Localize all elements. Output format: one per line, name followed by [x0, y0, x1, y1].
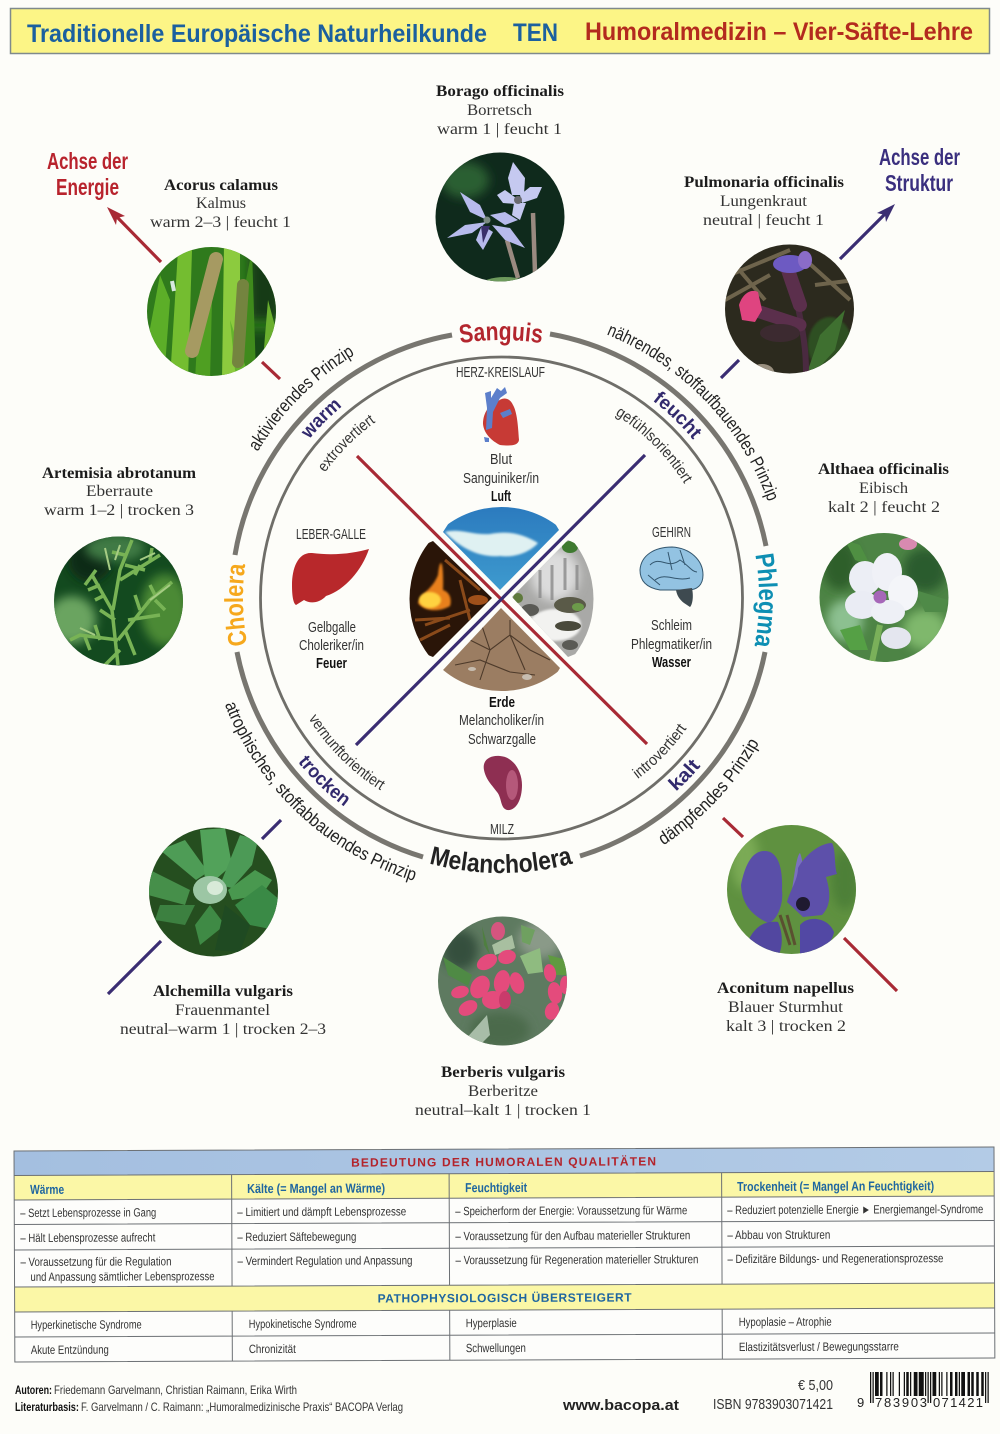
column headers: Wärme [30, 1182, 64, 1197]
plant photo: Berberis [435, 914, 571, 1049]
column: Feuchtigkeit: – Speicherform der Energie: Voraussetzung für Wärme [455, 1203, 688, 1218]
column: Trockenheit: – Defizitäre Bildungs- und Regenerationsprozesse [727, 1251, 944, 1266]
sector: Phlegma: Schleim [651, 618, 692, 634]
plant label: Alchemilla vulgaris [120, 983, 326, 1038]
price and ISBN [713, 1378, 833, 1413]
outer ring [235, 334, 766, 857]
credits: F. Garvelmann / C. Raimann: „Humoralmedizinische Praxis“ BACOPA Verlag [81, 1400, 403, 1414]
sector: Melancholera: Erde [489, 695, 515, 711]
wedge: earth [443, 608, 560, 691]
temperament orientation labels [310, 398, 694, 810]
credits [15, 1383, 403, 1414]
icon: liver [292, 549, 369, 605]
column: Trockenheit: – Abbau von Strukturen [727, 1228, 830, 1242]
icon: spleen [484, 756, 522, 810]
principle labels [226, 326, 777, 882]
plant label: Aconitum napellus: kalt 3 | trocken 2 [726, 1018, 846, 1035]
plant label: Aconitum napellus [717, 980, 854, 1035]
principle labels: aktivierendes Prinzip [251, 348, 354, 450]
plant label: Pulmonaria officinalis: Lungenkraut [720, 193, 808, 210]
humor name: Phlegma: Phlegma [753, 554, 778, 646]
table heading: pathophysiology: PATHOPHYSIOLOGISCH ÜBERSTEIGERT [378, 1289, 632, 1306]
pathophysiology rows: Akute Entzündung [31, 1343, 109, 1357]
column headers [30, 1178, 934, 1197]
axis label: Achse der Struktur: Achse der [879, 144, 960, 170]
sector: Sanguis: Blut [490, 452, 512, 468]
plant label: Borago officinalis: warm 1 | feucht 1 [437, 121, 562, 138]
humor name: Sanguis: Sanguis [460, 322, 542, 346]
credits: Literaturbasis: [15, 1400, 79, 1414]
sector: Melancholera [459, 695, 544, 838]
credits: Friedemann Garvelmann, Christian Raimann, Erika Wirth [54, 1383, 297, 1397]
plant label: Artemisia abrotanum [42, 465, 197, 519]
barcode [857, 1372, 989, 1410]
quality labels: feucht [654, 392, 702, 440]
axis label: Achse der Energie: Achse der [47, 148, 128, 174]
sector: Cholera: Choleriker/in [299, 638, 364, 654]
sector: Cholera: LEBER-GALLE [296, 527, 366, 543]
plant photo: Pulmonaria [725, 244, 854, 374]
column headers: Trockenheit (= Mangel An Feuchtigkeit) [737, 1178, 934, 1194]
column: Wärme: und Anpassung sämtlicher Lebensprozesse [30, 1269, 215, 1284]
inner ring [260, 357, 742, 839]
pathophysiology rows: Hypoplasie – Atrophie [739, 1315, 832, 1329]
sector: Cholera: Gelbgalle [308, 620, 356, 636]
plant label: Berberis vulgaris [415, 1064, 591, 1119]
pathophysiology rows [31, 1314, 899, 1357]
plant label: Alchemilla vulgaris: neutral–warm 1 | trocken 2–3 [120, 1021, 326, 1038]
plant label: Borago officinalis: Borago officinalis [436, 83, 564, 100]
column: Wärme [20, 1205, 215, 1284]
plant label: Acorus calamus: Acorus calamus [164, 177, 278, 194]
pathophysiology rows: Elastizitätsverlust / Bewegungsstarre [739, 1339, 899, 1354]
plant label: Artemisia abrotanum: Eberraute [86, 483, 153, 500]
axis label: Achse der Energie [47, 148, 128, 200]
plant label: Berberis vulgaris: Berberitze [468, 1083, 538, 1100]
temperament orientation labels: gefühlsorientiert [615, 408, 692, 484]
price and ISBN: € 5,00 [798, 1378, 833, 1394]
quality labels: trocken [299, 756, 349, 806]
quality labels: kalt [668, 760, 700, 791]
barcode: 9 [857, 1395, 864, 1410]
sector: Phlegma [631, 525, 712, 671]
temperament orientation labels: vernunftorientiert [310, 714, 385, 790]
table: humoral qualities [14, 1147, 995, 1362]
pathophysiology rows: Chronizität [249, 1342, 296, 1356]
principle labels: nährendes, stoffaufbauendes Prinzip [607, 326, 777, 500]
principle labels: dämpfendes Prinzip [660, 740, 760, 844]
axis label: Achse der Struktur: Struktur [885, 170, 953, 196]
column: Feuchtigkeit [455, 1203, 698, 1267]
column: Kälte: – Limitiert und dämpft Lebensprozesse [237, 1204, 407, 1219]
humor name: Cholera: Cholera [224, 564, 246, 646]
credits: Autoren: [15, 1383, 52, 1397]
plant label: Althaea officinalis: Eibisch [859, 480, 908, 497]
column: Kälte: – Reduziert Säftebewegung [237, 1230, 356, 1244]
plant label: Aconitum napellus: Blauer Sturmhut [728, 999, 844, 1016]
pathophysiology rows: Hypokinetische Syndrome [249, 1317, 357, 1331]
plant photo: Alchemilla [149, 828, 278, 956]
axis lines [356, 455, 647, 745]
wedge: water [512, 540, 594, 657]
title banner: Humoralmedizin – Vier-Säfte-Lehre [585, 18, 973, 46]
wedge: air [443, 507, 559, 590]
barcode: 071421 [933, 1395, 983, 1410]
plant label: Althaea officinalis: kalt 2 | feucht 2 [828, 499, 940, 516]
temperament orientation labels: introvertiert [632, 724, 687, 778]
sector: Sanguis: HERZ-KREISLAUF [456, 365, 545, 381]
wedge: fire [410, 541, 492, 657]
principle labels: atrophisches, stoffabbauendes Prinzip [226, 702, 416, 882]
column: Feuchtigkeit: – Voraussetzung für Regeneration materieller Strukturen [455, 1252, 698, 1267]
column: Kälte: – Vermindert Regulation und Anpassung [237, 1253, 412, 1268]
column: Wärme: – Hält Lebensprozesse aufrecht [20, 1230, 156, 1245]
column: Kälte [237, 1204, 412, 1268]
icon: heart [483, 387, 519, 445]
column: Wärme: – Setzt Lebensprozesse in Gang [20, 1205, 156, 1220]
table backgrounds [14, 1147, 995, 1362]
quality labels: warm [302, 400, 342, 438]
axis label: Achse der Energie: Energie [56, 174, 119, 200]
title banner [10, 8, 990, 54]
sector: Phlegma: GEHIRN [652, 525, 691, 541]
plant photo: Acorus [145, 245, 280, 380]
plant label: Berberis vulgaris: Berberis vulgaris [441, 1064, 565, 1081]
sector: Sanguis: Luft [491, 489, 511, 505]
sector: Melancholera: Melancholiker/in [459, 713, 544, 729]
table grid [14, 1147, 995, 1362]
plant label: Alchemilla vulgaris: Frauenmantel [175, 1002, 271, 1019]
price and ISBN: ISBN 9783903071421 [713, 1397, 833, 1413]
humor name: Melancholera: Melancholera [430, 846, 574, 874]
sector: Melancholera: MILZ [490, 822, 514, 838]
humoral diagram [224, 322, 778, 882]
column: Trockenheit [727, 1202, 984, 1266]
title banner: TEN [513, 19, 558, 47]
axis segments around the plants [108, 360, 897, 994]
plant label: Althaea officinalis [818, 461, 949, 516]
axis label: Achse der Struktur [879, 144, 960, 196]
column headers: Kälte (= Mangel an Wärme) [247, 1180, 385, 1196]
table heading: meaning of qualities: BEDEUTUNG DER HUMORALEN QUALITÄTEN [351, 1153, 656, 1170]
plant label: Acorus calamus: Kalmus [196, 195, 246, 212]
arrow: structure axis [840, 204, 895, 259]
plant label: Borago officinalis: Borretsch [467, 102, 532, 119]
sector: Sanguis: Sanguiniker/in [463, 471, 539, 487]
plant label: Aconitum napellus: Aconitum napellus [717, 980, 854, 997]
column: Wärme: – Voraussetzung für die Regulation [20, 1254, 171, 1269]
barcode: 783903 [875, 1395, 927, 1410]
quality labels [299, 392, 702, 810]
sector: Phlegma: Wasser [652, 655, 691, 671]
pathophysiology rows: Schwellungen [466, 1341, 526, 1355]
plant label: Pulmonaria officinalis [684, 174, 844, 229]
plant label: Alchemilla vulgaris: Alchemilla vulgaris [153, 983, 293, 1000]
plant label: Berberis vulgaris: neutral–kalt 1 | trocken 1 [415, 1102, 591, 1119]
plant photo: Borago [436, 152, 564, 282]
column headers: Feuchtigkeit [465, 1180, 528, 1195]
sector: Melancholera: Schwarzgalle [468, 732, 536, 748]
plant label: Artemisia abrotanum: warm 1–2 | trocken 3 [44, 502, 194, 519]
plant photo: Althaea [820, 533, 948, 662]
plant label: Artemisia abrotanum: Artemisia abrotanum [42, 465, 197, 482]
sector: Sanguis [456, 365, 545, 505]
sector: Cholera [292, 527, 369, 672]
plant label: Pulmonaria officinalis: Pulmonaria officinalis [684, 174, 844, 191]
sector: Phlegma: Phlegmatiker/in [631, 637, 712, 653]
plant label: Acorus calamus: warm 2–3 | feucht 1 [150, 214, 291, 231]
plant label: Althaea officinalis: Althaea officinalis [818, 461, 949, 478]
column: Feuchtigkeit: – Voraussetzung für den Aufbau materieller Strukturen [455, 1228, 690, 1243]
website: www.bacopa.at [562, 1397, 679, 1414]
icon: brain [640, 547, 703, 607]
title banner: Traditionelle Europäische Naturheilkunde [27, 20, 487, 48]
plant label: Acorus calamus [150, 177, 291, 231]
plant photo: Artemisia [54, 536, 183, 666]
sector: Cholera: Feuer [316, 656, 347, 672]
plant label: Borago officinalis [436, 83, 564, 138]
temperament orientation labels: extrovertiert [320, 414, 376, 471]
arrow: energy axis [107, 207, 161, 262]
plant label: Pulmonaria officinalis: neutral | feucht 1 [703, 212, 824, 229]
pathophysiology rows: Hyperplasie [466, 1316, 517, 1330]
central element wedges [410, 507, 594, 691]
pathophysiology rows: Hyperkinetische Syndrome [31, 1317, 142, 1332]
plant photo: Aconitum [725, 822, 860, 957]
